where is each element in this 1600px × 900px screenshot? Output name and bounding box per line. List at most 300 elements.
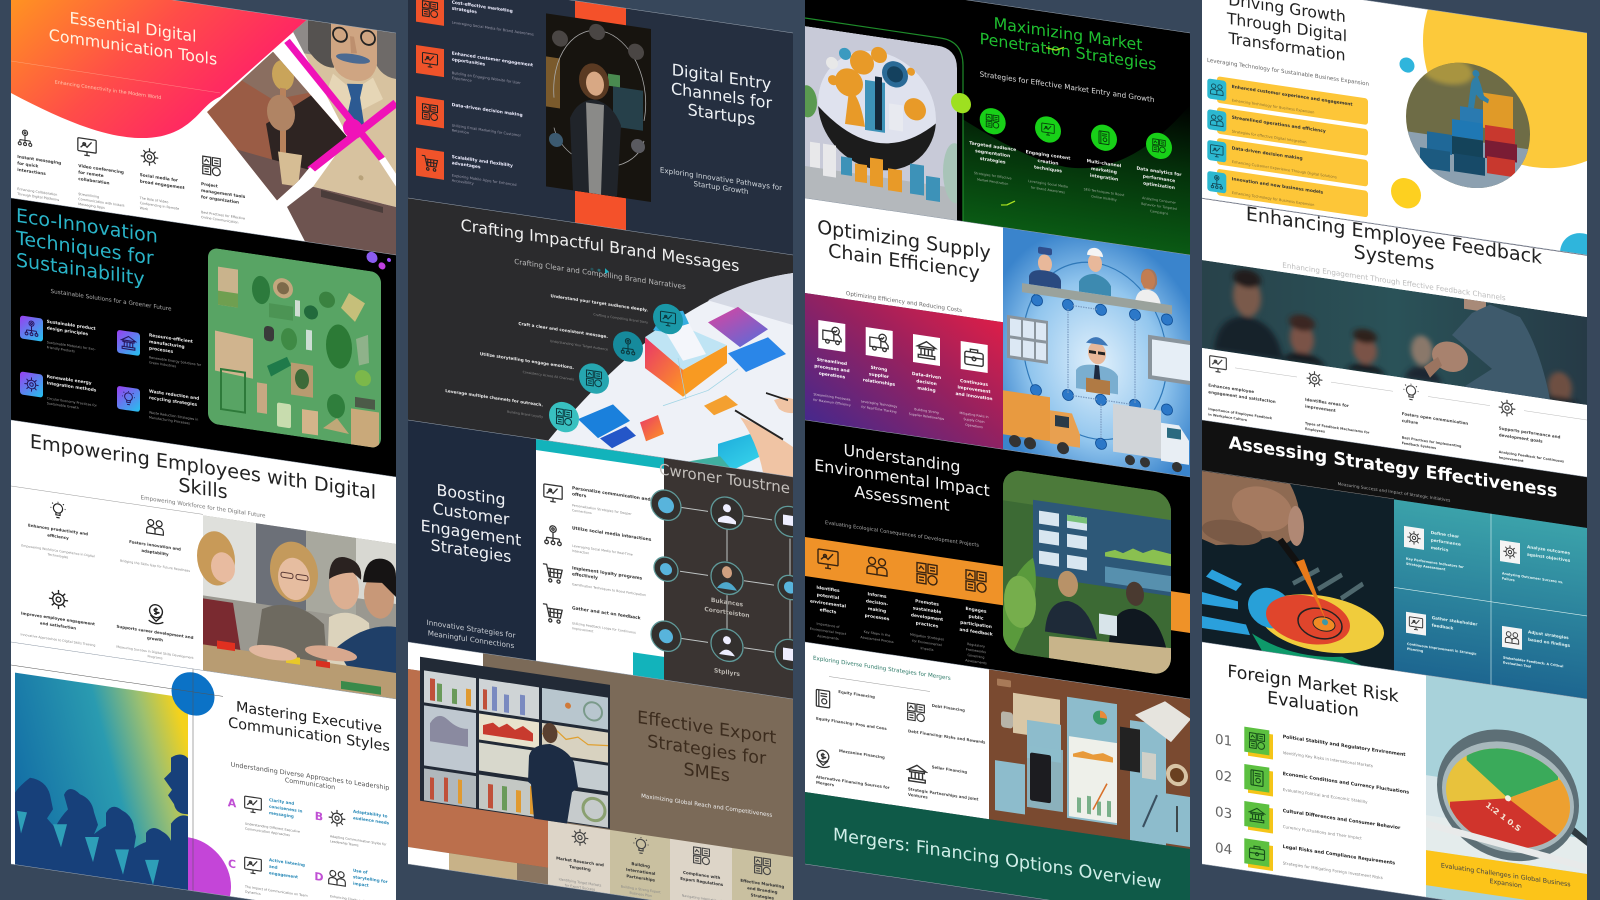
item: public participation [959, 569, 994, 666]
text block: Mezzanine Financing [839, 748, 885, 760]
item: open communication [1402, 382, 1490, 458]
text block: Craft a clear and consistent message. [518, 321, 608, 339]
icon: gear [572, 828, 588, 847]
item: video conferencing [78, 138, 125, 213]
subtitle: Exploring Innovative Pathways for [660, 165, 782, 192]
text block: Debt Financing [932, 703, 965, 713]
item B: Leadership Teams [330, 839, 359, 847]
item: data-driven decisions [1207, 136, 1368, 187]
text block: Enhanced customer experience and engagement [1232, 84, 1352, 108]
title: Foreign Market Risk [1227, 662, 1399, 707]
text block: Campaigns [1150, 209, 1168, 216]
text block: Seller Financing [932, 764, 967, 775]
text block: Manufacturing Processes [149, 415, 190, 426]
title: Communication Tools [49, 25, 217, 69]
icon: bank [908, 764, 926, 783]
title: Sustainability [16, 248, 145, 290]
item D: impact [353, 881, 369, 888]
icon tile [1502, 626, 1522, 650]
item: loyalty [543, 561, 646, 597]
photo: businesswoman in network ring [546, 13, 651, 202]
text block: Importance of [817, 622, 840, 629]
text block: Accessibility [452, 178, 475, 186]
text block: Political Stability and Regulatory Environment [1283, 734, 1406, 758]
icon: gear trophy [49, 589, 68, 611]
item: sustainable practices [910, 562, 944, 654]
side panels [1007, 315, 1048, 364]
icon tile [1207, 171, 1226, 194]
text block: offers [572, 491, 587, 499]
item C [228, 851, 308, 900]
illustration: isometric brand box [548, 237, 793, 477]
text block: Strong [871, 365, 887, 373]
photo: growth blocks [1402, 50, 1537, 201]
icon: chart [908, 703, 924, 722]
text block: integration methods [47, 380, 97, 394]
icon: cart [543, 564, 562, 584]
item: scalability [416, 148, 517, 192]
column 3 of slides [797, 0, 1191, 900]
item A [228, 791, 303, 839]
text block: Fosters open communication [1402, 411, 1468, 426]
icon tile [1406, 612, 1426, 636]
text block: for Export Success [565, 883, 596, 892]
blue circle [172, 669, 214, 719]
item D [314, 862, 389, 900]
text block: performance [1143, 174, 1175, 184]
item 02 [1215, 760, 1409, 817]
title: Startups [688, 100, 755, 129]
text block: Improves employee engagement [21, 611, 95, 626]
icon tile [416, 96, 444, 128]
subtitle: Startup Growth [694, 179, 748, 196]
title: Mergers: Financing Options Overview [833, 825, 1161, 894]
text block: public [969, 614, 984, 622]
text block: participation [960, 620, 992, 630]
text block: Utilizing Feedback Loops for Continuous [572, 621, 636, 635]
item B [315, 803, 390, 852]
item: project management [201, 156, 246, 226]
text block: Behavior for Targeted [1141, 202, 1177, 211]
title: Transformation [1228, 28, 1345, 65]
lime accent dot [951, 92, 971, 115]
item: equity financing [816, 686, 887, 731]
icon circle [980, 106, 1006, 136]
subtitle: Exploring Diverse Funding Strategies for Mergers [813, 656, 951, 682]
text block: Leveraging Social Media for Real-Time [572, 544, 633, 557]
text block: Importance of Employee Feedback [1208, 407, 1273, 420]
text block: Scalability and flexibility [452, 154, 513, 169]
icon tile [1207, 140, 1226, 163]
icon tile [1404, 526, 1424, 550]
panel: customer network diagram [651, 459, 805, 688]
text block: Leveraging Social Media [1028, 179, 1068, 189]
title: Penetration Strategies [980, 29, 1156, 74]
text block: development goals [1499, 432, 1543, 444]
item D: storytelling for [353, 874, 389, 884]
text block: Technologies [47, 552, 69, 560]
text block: effects [820, 607, 837, 616]
item: environmental effects [810, 548, 847, 642]
text block: Legal Risks and Compliance Requirements [1283, 844, 1395, 867]
text block: processes and [814, 363, 850, 374]
title: Empowering Employees with Digital [30, 430, 376, 504]
text block: performance [1431, 537, 1461, 547]
title: Environmental Impact [814, 455, 990, 500]
item: personalize [544, 481, 651, 524]
item: market research [556, 826, 604, 893]
text block: Renewable energy [47, 374, 92, 386]
slide: Assessing Strategy Effectiveness [1202, 420, 1587, 699]
text block: and satisfaction [40, 620, 76, 631]
icon circle [549, 400, 579, 434]
text block: Failure [1502, 576, 1515, 582]
subtitle: Enhancing Connectivity in the Modern World [55, 79, 161, 101]
text block: Innovation and new business models [1232, 176, 1323, 196]
purple half circle [145, 831, 231, 900]
central manager [1088, 341, 1106, 366]
text block: strategies [452, 6, 477, 15]
text block: Online Communication [201, 215, 238, 225]
item: supplier relationships [861, 326, 897, 414]
text block: techniques [1034, 164, 1062, 175]
white truck [1113, 404, 1161, 459]
text block: processes [865, 613, 890, 622]
text block: Resource-efficient [149, 332, 193, 345]
icon tile [416, 148, 444, 180]
text block: Bridging the Skills Gap for Future Readiness [120, 559, 190, 573]
item: compliance [680, 845, 724, 900]
text block: design principles [47, 325, 88, 337]
orange bars [575, 1, 626, 230]
icon: growth [694, 847, 709, 865]
bar [1217, 76, 1368, 125]
text block: Measuring Success in Digital Skills Development [116, 645, 194, 660]
number: 02 [1215, 767, 1232, 786]
title: Evaluation [1267, 688, 1359, 722]
icon: book [816, 689, 830, 708]
text block: in Workplace Culture [1208, 412, 1248, 422]
text block: Identifying Target Markets [559, 877, 602, 888]
text block: relationships [863, 377, 896, 388]
item: define metrics [1404, 526, 1464, 574]
text block: Enhancing Technology for Business Expansion [1232, 98, 1314, 115]
text block: for Maximum Efficiency [813, 398, 851, 407]
icon: thumbs up [147, 519, 163, 535]
text block: Equity Financing: Pros and Cons [816, 716, 887, 731]
title: Boosting [437, 480, 505, 509]
icon circle [579, 361, 609, 396]
text block: Video conferencing [78, 163, 124, 175]
text block: Engages [966, 606, 987, 615]
item B: Adapting Communication Styles for [330, 834, 387, 847]
text block: Leveraging Technology [861, 399, 897, 409]
number: 01 [1215, 731, 1232, 750]
text block: Enhanced customer engagement [452, 50, 533, 68]
diagram labels: Stpllyrs [714, 667, 740, 678]
item: audience [551, 287, 683, 336]
text block: Data-driven [912, 371, 941, 381]
text block: Empowering Workforce Competence in Digital [21, 544, 95, 558]
item 03 [1215, 797, 1401, 852]
decorative circles [1391, 0, 1600, 288]
icon tile [117, 386, 140, 412]
slide: Mergers: Financing Options Overview [805, 642, 1191, 900]
icon tile [1207, 109, 1226, 132]
text block: Experience [452, 76, 472, 83]
item: streamlined operations [1207, 106, 1368, 156]
item: channels [445, 385, 579, 434]
text block: Through Digital Platforms [16, 192, 59, 202]
icon: pin [816, 749, 830, 768]
text block: Currency Fluctuations and Their Impact [1283, 824, 1362, 841]
text block: International [626, 867, 656, 876]
text block: Gather and act on feedback [572, 605, 642, 622]
slide: Driving Growth Through Digital Transformation [1202, 0, 1600, 288]
item: innovation [1207, 167, 1368, 217]
icon: network [545, 525, 561, 546]
icon circle [1146, 131, 1172, 161]
text block: Analyzing Outcomes: Success vs. [1502, 571, 1563, 584]
text block: Best Practices for Effective [201, 210, 245, 221]
text block: Market Penetration [977, 177, 1008, 186]
subtitle: Strategies for Effective Market Entry and Growth [980, 69, 1154, 104]
item: streamlined processes [813, 319, 851, 407]
subtitle: Leveraging Technology for Sustainable Business Expansion [1207, 58, 1370, 88]
item: feedback [543, 601, 642, 641]
text block: opportunities [452, 57, 486, 68]
number: 04 [1215, 840, 1232, 858]
text block: Key Steps in the [864, 630, 890, 638]
text block: Crafting a Compelling Brand Story [593, 312, 648, 325]
title: Chain Efficiency [828, 239, 980, 284]
text block: advantages [452, 160, 481, 170]
letter badge: B [315, 810, 323, 824]
gradient blob [11, 0, 306, 138]
bar [1217, 107, 1368, 156]
text block: Building Brand Loyalty [507, 410, 543, 419]
icon tile [961, 341, 988, 373]
item 04 [1215, 834, 1395, 889]
item: data analytics [1136, 130, 1182, 218]
slide: Boosting Customer Engagement Strategies [408, 420, 805, 701]
text block: Types of Feedback Mechanisms for [1305, 421, 1370, 435]
text block: development [911, 612, 943, 623]
item B: audience needs [353, 815, 390, 826]
text block: Sustainable Materials for Eco- [47, 340, 96, 352]
icon tile [20, 315, 43, 342]
text block: SEO Techniques to Boost [1084, 187, 1125, 197]
text block: Evaluation Tool [1503, 661, 1531, 669]
column 4 of slides [1202, 0, 1600, 900]
text block: broad engagement [140, 179, 185, 190]
slide: Effective Export Strategies for SMEs [408, 642, 793, 900]
icon: globe graduate [149, 604, 163, 625]
text block: Alternative Financing Sources for [816, 774, 890, 790]
title: Communication Styles [228, 715, 390, 755]
item: employee engagement [1208, 355, 1297, 430]
text block: Strategy Assessment [1406, 562, 1446, 572]
text block: Waste reduction and [149, 388, 199, 402]
item A: Understanding Different Executive [245, 822, 300, 834]
text block: segmentation [975, 148, 1010, 159]
text block: Conferencing in Remote [140, 201, 179, 211]
item: social media [140, 148, 185, 210]
text block: Circular Economy Practices for [47, 396, 98, 408]
text block: potential [817, 592, 840, 601]
bar [1217, 138, 1368, 187]
item: customer experience [1207, 75, 1368, 125]
text block: Cultural Differences and Consumer Behavior [1283, 808, 1401, 831]
text block: marketing [1091, 166, 1117, 176]
item: mezzanine financing [816, 745, 890, 796]
photo: analyst viewing chart wall [420, 657, 610, 830]
item C: Dynamics [245, 890, 261, 896]
bar [1217, 169, 1368, 217]
text block: Continuous Improvement in Strategic [1407, 642, 1477, 656]
text block: Connections [572, 508, 592, 515]
text block: creation [1038, 158, 1058, 167]
photo: pencil on target chart [1202, 471, 1394, 670]
beam [1022, 283, 1172, 314]
orange band [805, 537, 1190, 633]
text block: against objectives [1527, 552, 1571, 563]
text block: Partnerships [626, 873, 656, 883]
text block: collaboration [78, 176, 109, 186]
text block: Governing [968, 653, 984, 660]
text block: Analyzing Consumer [1142, 196, 1177, 205]
text block: Mergers [816, 780, 835, 787]
text block: metrics [1431, 545, 1449, 553]
text block: and innovation [955, 391, 993, 402]
text block: Communication with Instant [78, 197, 125, 208]
column 2 of slides [408, 0, 805, 900]
item: customer engagement [416, 45, 533, 92]
text block: and Branding [747, 885, 778, 895]
letter badge: C [228, 857, 236, 871]
diagram heading: Cwroner Toustrne [659, 460, 790, 498]
text block: Frameworks [966, 647, 986, 654]
text block: Effective Marketing [740, 878, 784, 889]
item: data-driven decision making [416, 96, 523, 143]
item: decision-making [860, 556, 894, 644]
text block: Feedback Systems [1402, 441, 1436, 450]
item: engagement [21, 584, 95, 647]
text block: Define clear [1431, 530, 1460, 539]
text block: Building an Engaging Website for User [452, 71, 521, 85]
diagram labels: Bukances [711, 597, 744, 609]
text block: Supports performance and [1499, 425, 1561, 440]
text block: Employees [1305, 427, 1325, 434]
subtitle: Empowering Workforce for the Digital Future [141, 495, 266, 520]
item: marketing [740, 855, 784, 900]
text block: Targeted audience [969, 140, 1016, 153]
item: adjust strategies [1502, 625, 1570, 675]
text block: Friendly Products [47, 345, 75, 353]
text block: Compliance with [683, 870, 720, 880]
text block: Data analytics for [1136, 166, 1182, 178]
text block: Identifying Key Risks in International Markets [1283, 750, 1373, 768]
item: data-driven decisions [909, 333, 944, 421]
item: sustainable product design [20, 316, 96, 352]
icon circle [613, 329, 643, 364]
text block: Enhances employee [1208, 382, 1254, 394]
text block: Engaging content [1026, 149, 1071, 162]
title: Eco-Innovation [16, 204, 158, 248]
text block: Promotes [915, 598, 939, 608]
text block: feedback [1432, 623, 1454, 631]
text block: Streamlining [78, 192, 99, 199]
text block: decision [916, 378, 937, 387]
icon tile [1207, 78, 1226, 101]
text block: Impacts [920, 646, 934, 652]
text block: Retention [452, 128, 469, 135]
text block: Data-driven decision making [1232, 145, 1303, 162]
item: targeted audience [969, 105, 1016, 187]
title: SMEs [684, 760, 730, 787]
progress arrows [590, 266, 609, 275]
item 01 [1215, 722, 1406, 779]
green outline [805, 18, 963, 221]
item A: Communication Approaches [245, 827, 290, 837]
orange truck [1003, 390, 1050, 441]
text block: based on findings [1528, 637, 1570, 648]
text block: Export Regulations [680, 876, 724, 887]
item D: Use of [353, 868, 368, 875]
letter badge: A [228, 796, 237, 810]
text block: Analyzing Feedback for Continuous [1499, 450, 1564, 464]
text block: improvement [958, 384, 990, 395]
text block: Gamification Techniques to Boost Participation [572, 582, 646, 597]
text block: management tools [201, 188, 246, 199]
item A: Clarity and [269, 797, 294, 806]
item: instant messaging [16, 129, 61, 202]
text block: Sustainable product [47, 319, 96, 332]
text block: adaptability [141, 548, 169, 557]
text block: Utilizing Email Marketing for Customer [452, 123, 521, 138]
text block: Operations [965, 423, 983, 429]
title: Effective Export [637, 708, 776, 748]
text block: strategies [980, 156, 1006, 166]
slide: Mastering Executive Communication Styles [11, 642, 396, 900]
text block: Innovative Approaches to Digital Skills Training [21, 632, 95, 647]
text block: Implement loyalty programs [572, 565, 643, 582]
item: innovation [120, 515, 190, 573]
item B: Adaptability to [353, 809, 388, 819]
text block: Best Practices for Implementing [1402, 436, 1462, 448]
text block: optimization [1143, 181, 1175, 191]
text block: Mitigation Strategies [910, 633, 944, 642]
item: partnerships [621, 834, 661, 899]
text block: Regulatory [967, 642, 985, 649]
icon tile [1244, 801, 1269, 830]
icon: monitor [544, 484, 562, 503]
photo: green flat-lay [208, 247, 381, 449]
text block: Gather stakeholder [1432, 615, 1478, 627]
letter badge: D [314, 870, 324, 884]
icon tile [117, 330, 140, 356]
item: renewable energy [20, 372, 97, 409]
item C: Active listening [269, 857, 305, 868]
text block: for remote [78, 169, 104, 178]
icon: monitor [818, 549, 838, 570]
diagram labels: Corortteiston [704, 606, 750, 620]
text block: recycling strategies [149, 395, 197, 408]
text block: making [868, 606, 886, 615]
title: Digital Entry [672, 60, 772, 94]
photo: team around a table [197, 515, 396, 699]
text block: Strategies for Effective [974, 171, 1012, 181]
